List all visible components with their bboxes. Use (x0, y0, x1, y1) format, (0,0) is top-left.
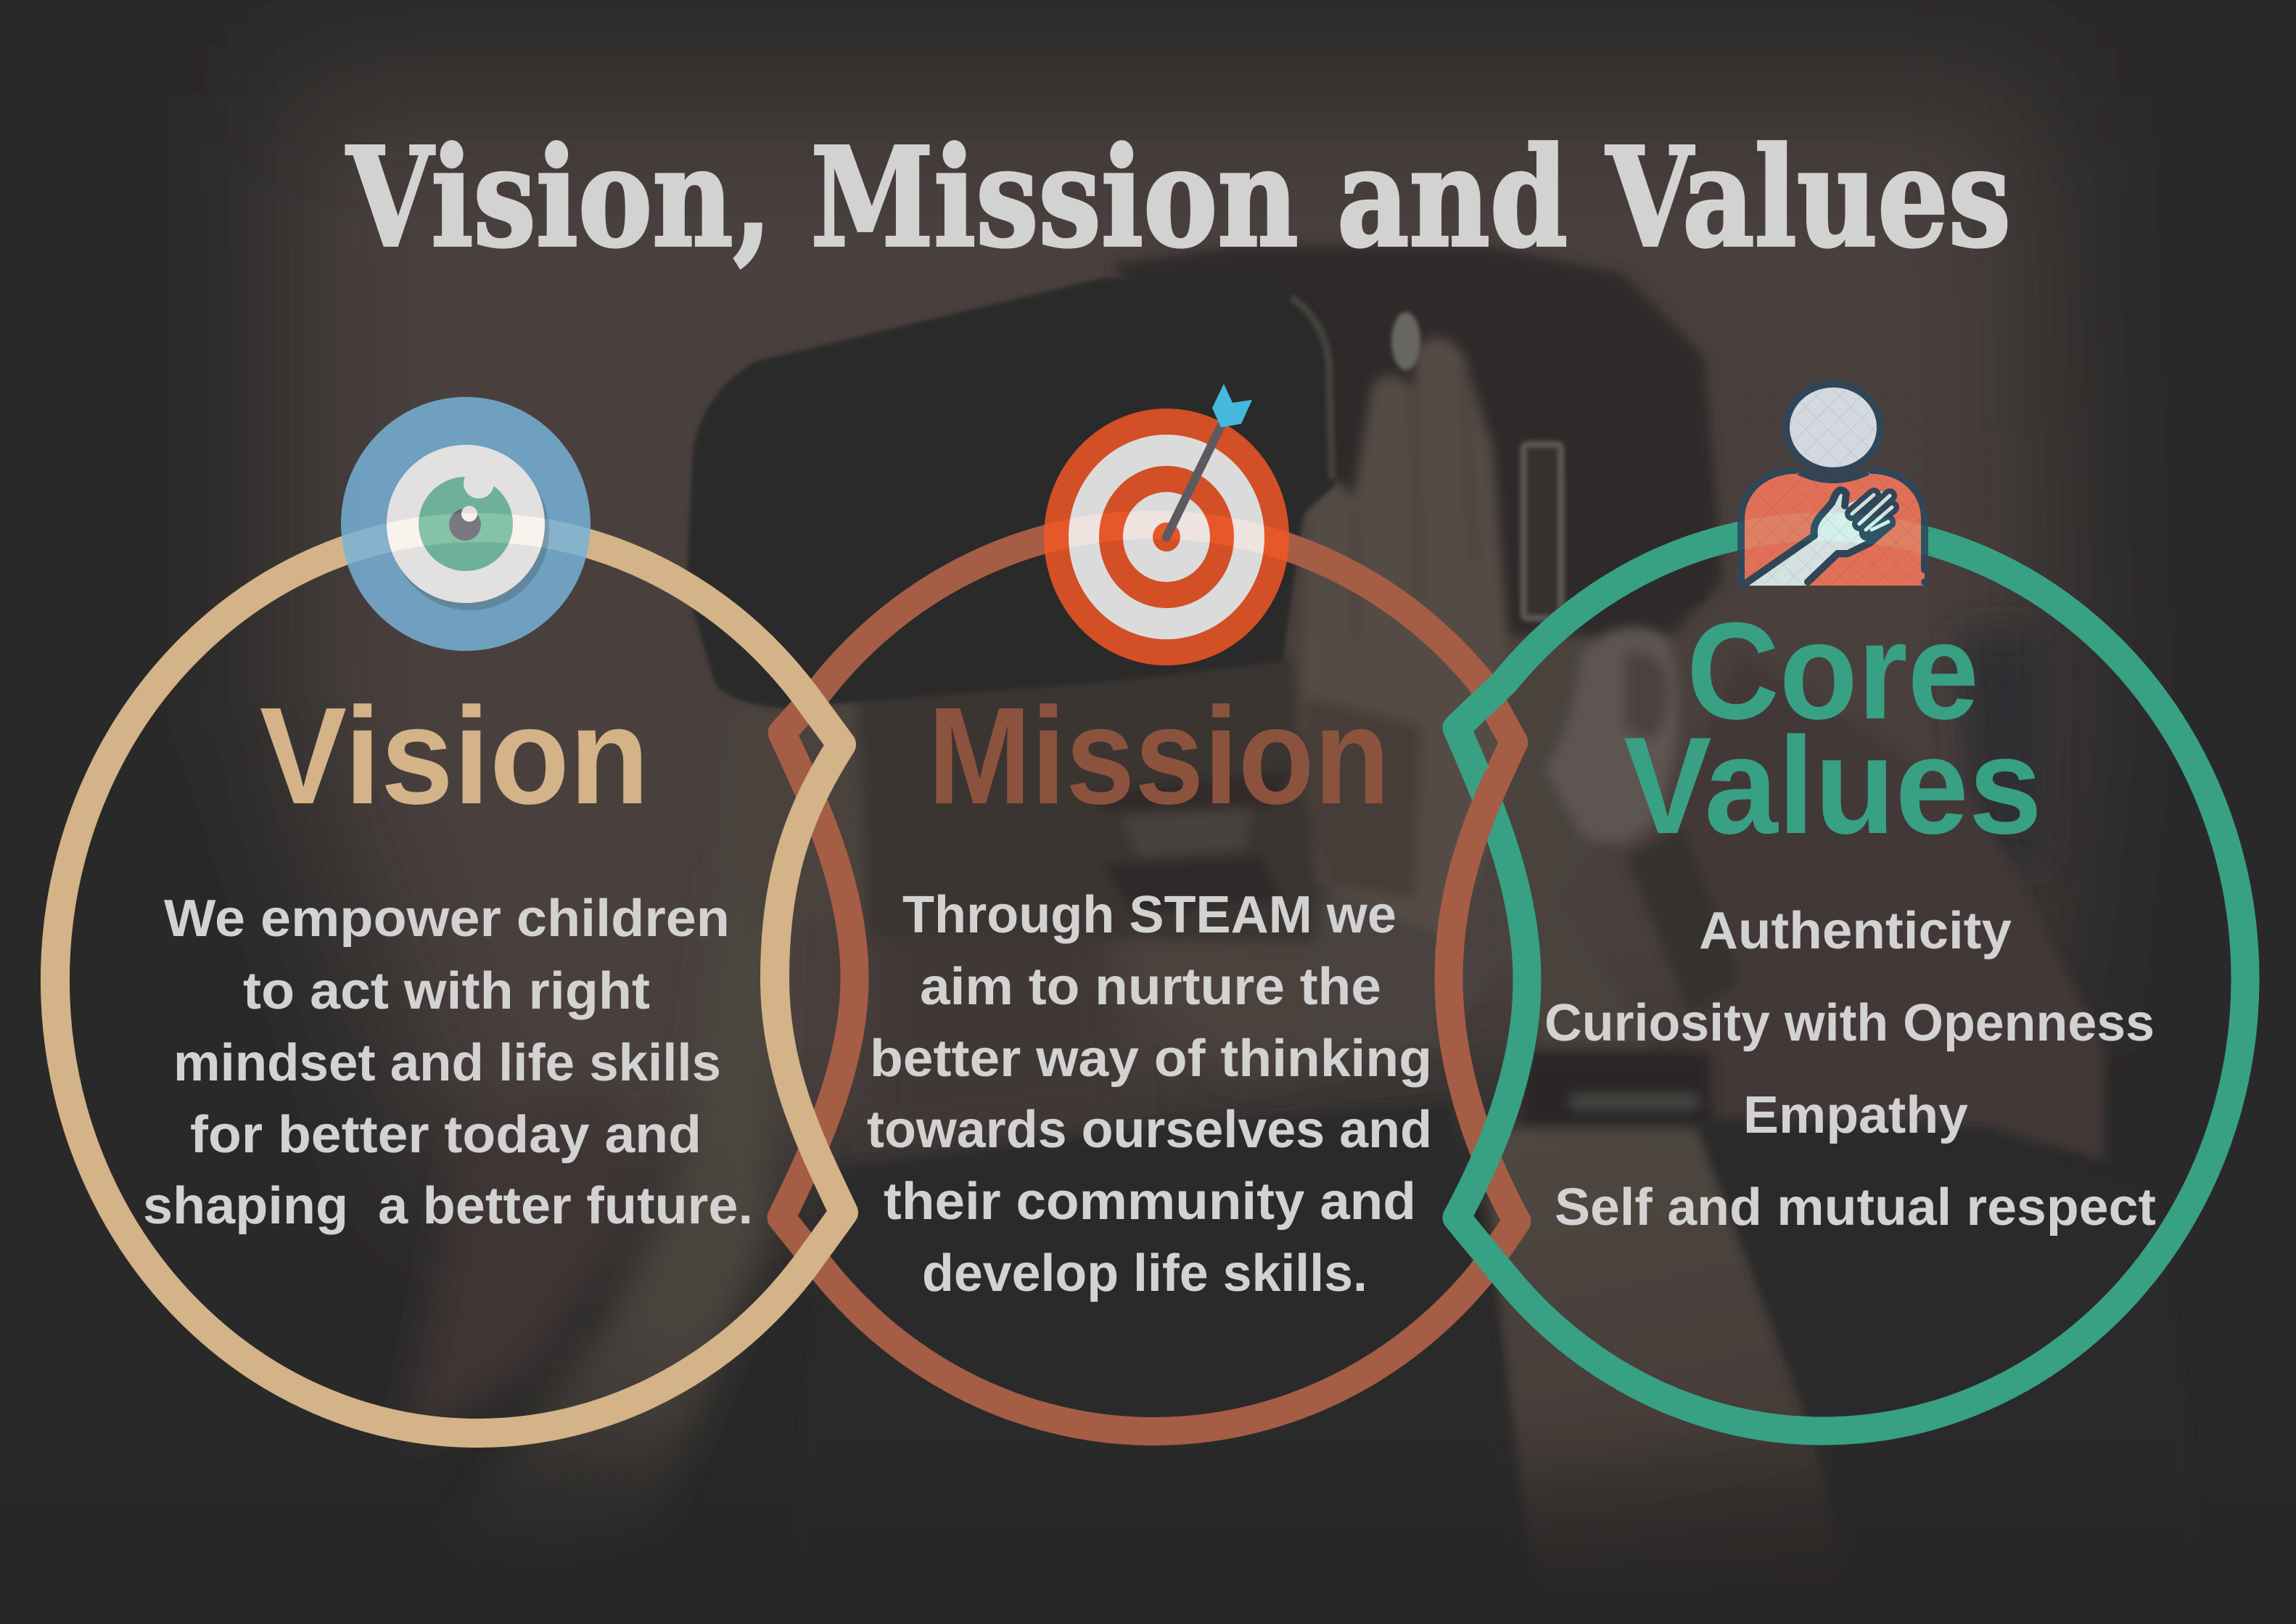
icon: person with hand on heart (1737, 381, 1933, 588)
ring: Core Values (1457, 527, 2245, 1431)
text block: Mission statement: develop life skills. (922, 1244, 1367, 1303)
text block: Mission statement (867, 886, 1432, 1303)
text block: Mission statement: Through STEAM we (902, 886, 1396, 944)
text block: Vision statement: to act with right (243, 962, 650, 1020)
text block: Mission statement: towards ourselves and (867, 1101, 1432, 1159)
text block: Mission statement: aim to nurture the (920, 958, 1381, 1016)
text block: Vision statement: mindset and life skills (173, 1034, 721, 1092)
background wrist watch and right forearm (1480, 1052, 1886, 1624)
heading: Vision: Vision (260, 679, 649, 833)
background fingertip and strap (1391, 312, 1705, 618)
text block: Vision statement: We empower children (164, 890, 730, 948)
ring: Mission (781, 525, 1517, 1431)
text block: Vision statement: for better today and (190, 1106, 701, 1164)
background clothing (783, 1103, 1538, 1624)
heading: Core Values (1624, 594, 2042, 863)
text block: Vision statement: shaping a better future. (143, 1177, 753, 1235)
text block: Vision statement (143, 890, 753, 1235)
text block: Core Values list: Authenticity (1699, 902, 2012, 960)
text block: Mission statement: their community and (884, 1173, 1416, 1231)
panel: Core Values (1544, 594, 2156, 1237)
background wall glow (290, 94, 2053, 1190)
ring overlap: Mission over Core Values (1458, 769, 1517, 863)
text block: Core Values list (1544, 902, 2156, 1237)
text block: Mission statement: better way of thinking (870, 1030, 1432, 1088)
text block: Core Values list: Self and mutual respect (1555, 1178, 2156, 1237)
heading: Core Values: Values (1624, 709, 2042, 863)
background hair (1109, 245, 1723, 639)
icon: target with arrow (1044, 409, 1289, 665)
text block: Core Values list: Empathy (1743, 1086, 1968, 1144)
background left forearm and shoulder tones (392, 631, 2046, 1624)
background hand and face (711, 337, 1523, 1045)
icon: eye (341, 397, 591, 651)
panel: Vision (143, 679, 753, 1235)
icon: arrow in target (1166, 384, 1252, 537)
panel: Mission (867, 679, 1432, 1303)
heading: Core Values: Core (1687, 594, 1979, 748)
heading: Mission: Mission (928, 679, 1390, 833)
background headset edge (1291, 298, 1332, 479)
ring: Vision (55, 528, 844, 1433)
background ear and neck (1502, 627, 2104, 1161)
text block: Core Values list: Curiosity with Openness (1544, 994, 2155, 1052)
background VR headset (686, 278, 1335, 708)
